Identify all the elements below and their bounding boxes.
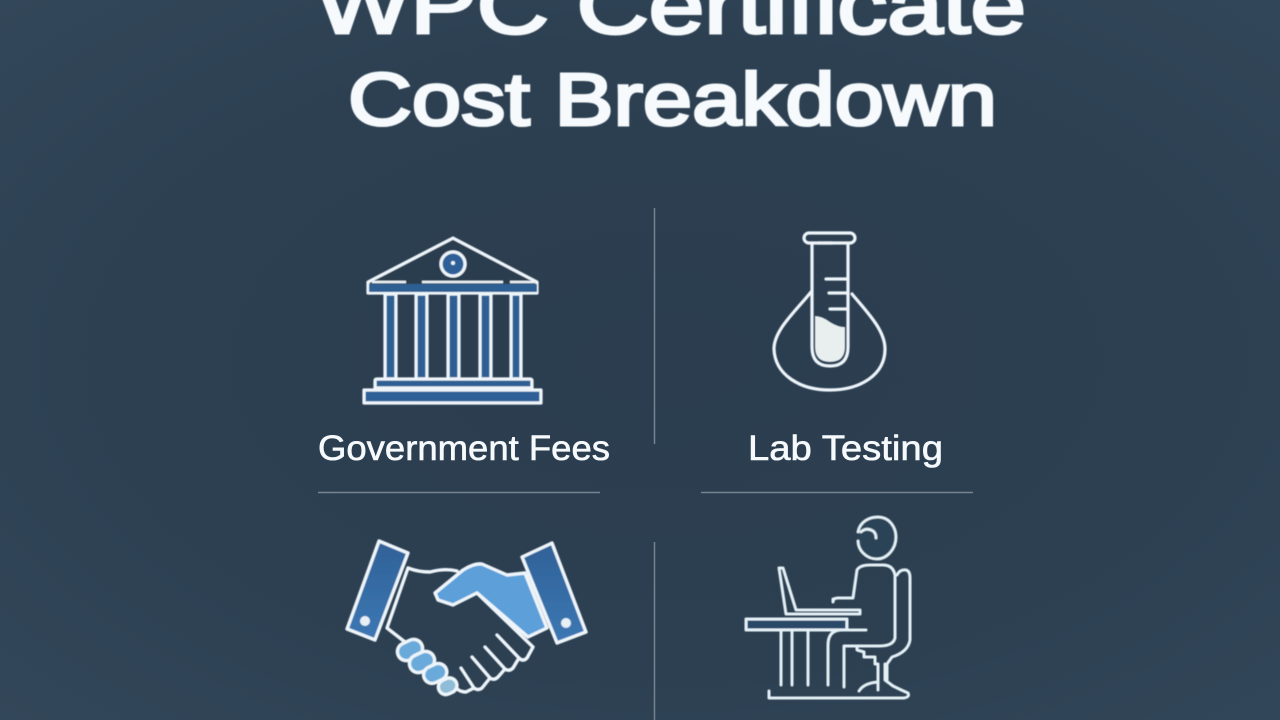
title [316, 0, 1026, 141]
label: Lab Testing: Lab Testing [748, 429, 943, 468]
icon: lab flask [774, 233, 885, 390]
fingers [456, 593, 533, 692]
right light hand [435, 564, 547, 637]
left hand outline [387, 568, 457, 642]
label: Government Fees: Government Fees [318, 429, 610, 468]
icon: government building [364, 238, 541, 403]
right sleeve [522, 543, 586, 643]
icon: handshake [347, 541, 586, 697]
icon: person at laptop [746, 517, 910, 698]
dividers [318, 208, 973, 720]
left sleeve [347, 541, 408, 640]
title: Cost Breakdown [348, 58, 997, 141]
knuckles [394, 636, 459, 697]
